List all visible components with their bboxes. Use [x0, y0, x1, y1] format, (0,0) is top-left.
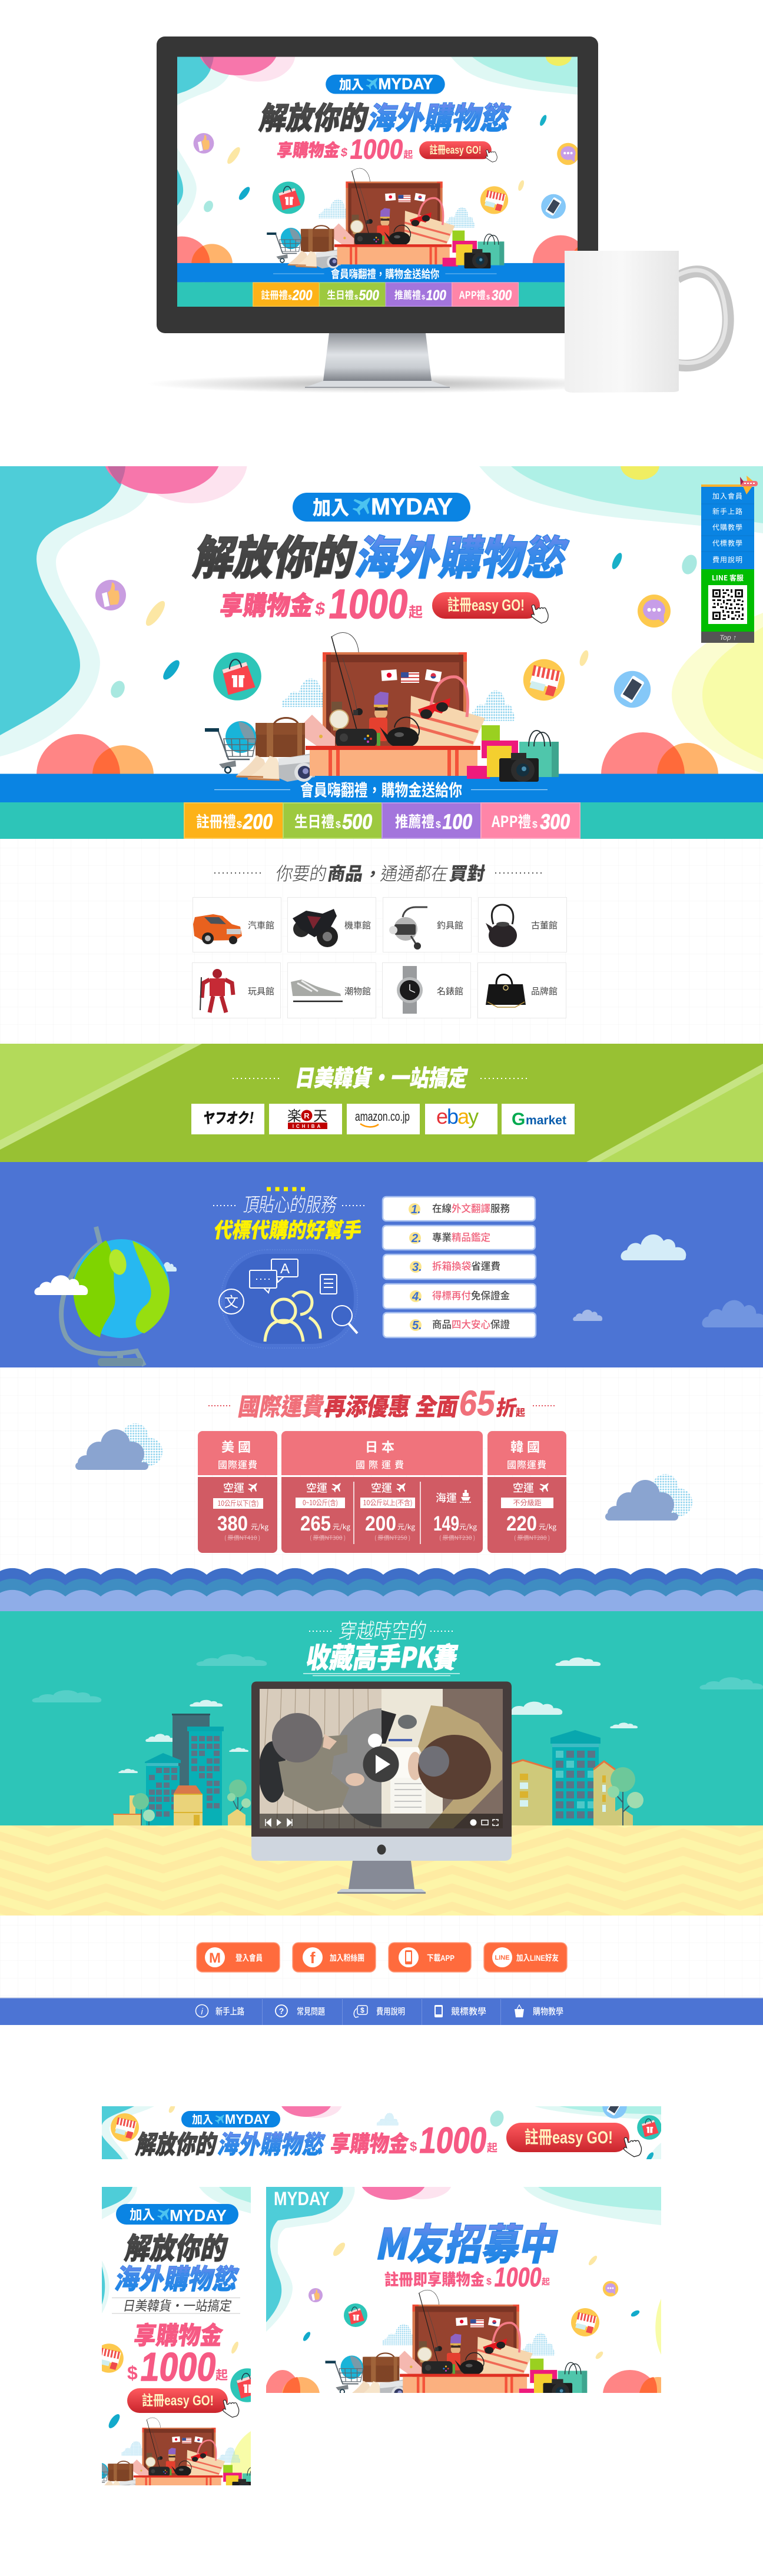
heading: products [214, 859, 544, 885]
logo: Rakuten: 楽 [287, 1104, 301, 1125]
icon: plane [740, 476, 758, 494]
footer labels: 常見問題 [297, 2007, 325, 2017]
image: watch [397, 966, 423, 1014]
table: Korea: ( 原價NT280 ) [514, 1533, 550, 1542]
banner offer: 起 [215, 2366, 228, 2384]
footer navigation [0, 1997, 763, 2025]
decorative right triangle [586, 1064, 763, 1162]
banner title: 海外購物慾 [112, 2257, 243, 2297]
gift tiles: $ [436, 820, 441, 830]
side navigation: LINE 客服 [712, 573, 744, 583]
logo: Gmarket: G [512, 1110, 525, 1129]
illustration: customer service: 文 [224, 1290, 238, 1311]
logo: Gmarket: market [526, 1114, 566, 1127]
screen hero artwork: 500 [358, 288, 380, 304]
white mug [565, 251, 728, 393]
banner offer: 1000 [493, 2262, 544, 2292]
table: USA: 空運 [223, 1480, 244, 1495]
panel: product categories [0, 839, 763, 1044]
table: Japan: 149 [433, 1512, 459, 1535]
category labels: 玩具館 [248, 987, 274, 997]
footer labels [215, 2006, 563, 2017]
side navigation: 代標教學 [712, 538, 743, 548]
category labels: 名錶館 [437, 987, 463, 997]
gift tiles: 生日禮 [294, 810, 334, 832]
logo: Yahoo auctions: ヤフオク! [202, 1107, 256, 1128]
button: app [389, 1943, 471, 1972]
category labels: 古董館 [531, 921, 558, 931]
offer text [220, 589, 423, 619]
screen hero artwork: 會員嗨翻禮，購物金送給你 [331, 265, 440, 281]
banner offer [331, 2127, 497, 2154]
offer text: 享購物金 [218, 585, 316, 622]
image: motorcycle [293, 909, 338, 947]
icon: phone [434, 2005, 443, 2017]
banner brand: MYDAY [274, 2188, 330, 2209]
side navigation: 代購教學 [712, 522, 743, 532]
gift tiles: $ [237, 820, 242, 830]
video frame [258, 1689, 503, 1828]
banner offer: 起 [487, 2140, 497, 2155]
table: Japan: ( 原價NT300 ) [310, 1533, 346, 1542]
shadow under monitor [147, 374, 618, 393]
button: app: 下載APP [427, 1953, 455, 1963]
table: USA: 380 [217, 1512, 248, 1535]
table: Korea: 元/kg [539, 1522, 556, 1532]
table: Korea: 國際運費 [507, 1457, 547, 1471]
button: login: 登入會員 [235, 1952, 263, 1964]
button: login [197, 1943, 280, 1972]
list: service items: 2. [411, 1232, 422, 1245]
mockup: desktop monitor showing the landing page [130, 25, 728, 393]
heading: one-stop: 日美韓貨・一站搞定 [293, 1060, 471, 1093]
screen hero artwork: 100 [425, 288, 447, 304]
gift tiles: 500 [341, 809, 374, 834]
heading: services: 代標代購的好幫手 [212, 1214, 364, 1244]
table: Korea: 韓國 [510, 1437, 543, 1456]
banner button [127, 2388, 240, 2419]
table: Japan: 日本 [365, 1437, 398, 1456]
list: service items: 1. [411, 1203, 421, 1216]
banner offer: $ [127, 2362, 138, 2384]
list: service items: 3. [412, 1261, 422, 1274]
monitor bezel [157, 36, 598, 333]
monitor with video [251, 1681, 512, 1894]
banner pill: MYDAY [225, 2112, 270, 2127]
banner pill: MYDAY [170, 2206, 227, 2225]
heading: contest: 收藏高手PK賽 [304, 1635, 462, 1676]
screen hero artwork: 解放你的 [256, 94, 373, 138]
button: register [432, 592, 550, 625]
decorative left triangle [0, 1044, 200, 1147]
footer labels: 購物教學 [533, 2006, 563, 2017]
banner title [114, 2233, 240, 2292]
image: fishing reel [389, 907, 427, 950]
banner title: 解放你的 [133, 2124, 221, 2161]
table: Korea: 空運 [513, 1480, 534, 1495]
table: Japan: 元/kg [333, 1522, 350, 1532]
banner pill: 加入 [130, 2207, 155, 2222]
side navigation: 新手上路 [712, 506, 743, 516]
table: Japan: 國際運費 [356, 1457, 407, 1471]
icon: basket [515, 2005, 524, 2017]
icon: info [195, 2005, 208, 2017]
side navigation: 費用說明 [712, 555, 743, 565]
heading: contest [303, 1614, 462, 1676]
screen hero artwork: 海外購物慾 [364, 94, 515, 138]
table: Japan: 200 [365, 1512, 396, 1535]
gift tiles [197, 814, 570, 829]
list: service items: 4. [412, 1290, 422, 1303]
screen hero artwork: MYDAY [378, 75, 433, 93]
table: Japan: 10公斤以上(不含) [363, 1498, 412, 1508]
hero background shapes and suitcase illustration [0, 466, 763, 839]
table: Japan: ( 原價NT230 ) [439, 1533, 475, 1542]
banner offer: 1000 [417, 2120, 490, 2161]
category labels: 機車館 [344, 921, 371, 931]
category labels: 釣具館 [437, 921, 463, 931]
button: LINE: LINE [495, 1954, 510, 1961]
gift tiles: APP禮 [491, 810, 531, 832]
gift tiles: 註冊禮 [196, 810, 236, 832]
table: Japan: 空運 [306, 1480, 327, 1495]
list: service items: 拆箱換袋省運費 [432, 1261, 500, 1272]
banner title [134, 2131, 326, 2156]
screen hero artwork: $ [422, 294, 425, 301]
heading: shipping discount: 折 [494, 1392, 520, 1422]
screen hero artwork [177, 57, 578, 307]
gift tiles: $ [336, 820, 341, 830]
screen hero artwork: APP禮 [459, 288, 486, 303]
city right [512, 1730, 643, 1825]
icon: info: i [201, 2007, 203, 2017]
side navigation: Top ↑ [719, 633, 737, 642]
logo: Amazon [347, 1104, 420, 1134]
icon: question [276, 2005, 287, 2017]
heading: services: 頂貼心的服務 [241, 1189, 340, 1217]
list: service items: 在線外文翻譯服務 [432, 1203, 510, 1214]
screen hero artwork: 300 [490, 288, 513, 304]
logo: Rakuten [269, 1104, 342, 1134]
illustration: customer service [219, 1250, 357, 1348]
city left [113, 1714, 251, 1825]
panel: action buttons [0, 1916, 763, 1998]
offer text: 1000 [326, 580, 412, 627]
title: 解放你的 [189, 521, 363, 587]
category labels [248, 921, 558, 997]
button: LINE [484, 1943, 567, 1972]
banner: horizontal leaderboard [102, 2106, 661, 2159]
clouds [158, 1234, 763, 1327]
ground: chevron pattern [0, 1825, 763, 1916]
heading: contest: 穿越時空的 [337, 1614, 429, 1645]
offer text: 起 [409, 600, 423, 621]
button: register: 註冊easy GO! [447, 596, 525, 614]
list: service items: 商品四大安心保證 [432, 1319, 510, 1330]
screen hero artwork: 生日禮 [327, 288, 354, 303]
banner: M friends recruitment [266, 2187, 661, 2393]
heading: products: 通通都在 [379, 859, 450, 885]
image: handbag [486, 975, 526, 1007]
footer labels: 競標教學 [451, 2006, 486, 2017]
play button [363, 1746, 399, 1782]
heading: shipping discount: 全面 [413, 1387, 462, 1422]
table: USA: 10公斤以下(含) [218, 1498, 259, 1508]
logo: Yahoo auctions [191, 1104, 264, 1134]
list: service items: 專業精品鑑定 [432, 1231, 490, 1243]
category labels: 潮物館 [344, 987, 371, 997]
button: fans: 加入粉絲團 [330, 1952, 364, 1964]
screen hero artwork: 1000 [348, 134, 406, 164]
cloud left [75, 1423, 162, 1470]
screen hero artwork: $ [486, 294, 490, 301]
gift tiles: 推薦禮 [395, 810, 434, 832]
button: fans: f [310, 1949, 316, 1967]
icon: fee bubble: $ [360, 2006, 364, 2014]
list: service items: 得標再付免保證金 [432, 1290, 510, 1302]
icon: fee bubble [354, 2006, 367, 2017]
heading: shipping discount: 再添優惠 [322, 1387, 413, 1422]
screen hero artwork: 200 [291, 288, 314, 304]
heading: services [212, 1189, 366, 1244]
table: USA: 國際運費 [218, 1457, 258, 1471]
banner illustration [102, 2417, 251, 2485]
panel: services [0, 1162, 763, 1367]
table: Japan: 元/kg [459, 1522, 477, 1532]
banner button: 註冊easy GO! [525, 2128, 613, 2147]
list: service items: 5. [412, 1319, 422, 1332]
screen hero artwork: 註冊禮 [261, 288, 288, 303]
banner offer: 註冊即享購物金 [384, 2267, 485, 2290]
logo: eBay [425, 1104, 497, 1134]
logo: eBay: bay [447, 1104, 477, 1128]
banner title: M友招募中 [372, 2210, 565, 2272]
icon: question: ? [279, 2006, 284, 2016]
pill: join MYDAY: 加入 [313, 497, 349, 519]
banner offer: $ [486, 2277, 492, 2287]
banner offer: 享購物金 [329, 2126, 411, 2158]
screen hero artwork: 起 [403, 147, 413, 161]
banner offer: 起 [542, 2276, 550, 2288]
table: Japan: 元/kg [397, 1522, 415, 1532]
heading: shipping discount: 65 [457, 1383, 498, 1423]
panel: hero banner [0, 466, 763, 839]
footer labels: 費用說明 [376, 2007, 405, 2017]
logo: Gmarket [502, 1104, 575, 1134]
screen hero artwork: $ [354, 294, 358, 301]
screen hero artwork: 推薦禮 [394, 288, 421, 303]
heading: products: 你要的 [274, 859, 329, 885]
decorative wave layers [0, 1568, 763, 1644]
banner title: 海外購物慾 [215, 2124, 329, 2161]
gift tiles: $ [532, 820, 538, 830]
screen hero artwork: 享購物金 [276, 137, 341, 161]
panel: international shipping [0, 1367, 763, 1611]
image: iron teapot [486, 905, 517, 947]
screen content [177, 57, 578, 307]
gift tiles: 200 [241, 809, 275, 834]
banner offer: $ [410, 2139, 417, 2154]
title: 海外購物慾 [350, 521, 575, 587]
screen hero artwork: $ [288, 294, 291, 301]
banner pill [181, 2111, 280, 2127]
image: robot toy [200, 969, 233, 1013]
banner pill [116, 2204, 238, 2225]
table: USA: 美國 [221, 1437, 254, 1456]
screen hero artwork: 加入 [339, 78, 364, 92]
table: USA: 元/kg [251, 1522, 268, 1532]
sky clouds [32, 1654, 763, 1773]
gift tiles: 100 [441, 809, 475, 834]
button: login: M [209, 1950, 221, 1966]
heading: products: 買對 [447, 859, 487, 885]
table: USA [198, 1431, 277, 1553]
cloud right [605, 1474, 692, 1521]
monitor stand [305, 333, 450, 388]
banner offer [384, 2262, 550, 2292]
table: USA: ( 原價NT410 ) [224, 1533, 260, 1542]
logo: Amazon: amazon.co.jp [355, 1109, 410, 1124]
offer text: $ [314, 599, 327, 619]
heading: shipping discount: 起 [516, 1405, 525, 1419]
table: Korea: 220 [506, 1512, 537, 1535]
banner offer: 享購物金 [132, 2316, 225, 2352]
button: LINE: 加入LINE好友 [516, 1953, 559, 1963]
gift tiles: 300 [539, 809, 572, 834]
banner button [506, 2123, 643, 2159]
banner offer: 1000 [138, 2345, 220, 2389]
panel: video contest [0, 1611, 763, 1924]
category cards [192, 897, 566, 1018]
image: car [193, 914, 242, 944]
footer labels: 新手上路 [215, 2006, 244, 2017]
button: fans [293, 1943, 376, 1972]
logo: eBay: e [436, 1104, 447, 1128]
logo: Rakuten: ICHIBA [293, 1124, 323, 1129]
banner button: 註冊easy GO! [142, 2393, 214, 2409]
image: sneaker [291, 980, 343, 1002]
screen hero artwork: $ [340, 147, 349, 159]
table: Japan [281, 1431, 483, 1553]
panel: marketplaces [0, 1044, 763, 1162]
heading: products: ， [362, 861, 384, 885]
side navigation: 加入會員 [712, 491, 743, 501]
heading: products: 商品 [326, 859, 366, 885]
table: Japan: 海運 [436, 1490, 457, 1505]
icon: globe [34, 1227, 170, 1366]
banner illustration [326, 2290, 587, 2401]
logo: Rakuten: 天 [313, 1104, 327, 1125]
logo: Rakuten: R [304, 1111, 310, 1120]
pill: join MYDAY: MYDAY [371, 494, 453, 520]
banner: vertical skyscraper [102, 2187, 251, 2485]
banner pill: 加入 [192, 2113, 213, 2126]
table: Japan: ( 原價NT250 ) [374, 1533, 410, 1542]
screen hero artwork: 註冊easy GO! [430, 144, 481, 156]
title [192, 533, 570, 579]
banner title: 解放你的 [122, 2225, 232, 2268]
table: Korea [487, 1431, 566, 1553]
category labels: 品牌館 [531, 987, 558, 997]
list: service items [383, 1197, 536, 1337]
heading: shipping discount [208, 1383, 556, 1423]
banner offer [127, 2322, 227, 2382]
side navigation [701, 476, 758, 643]
table: Japan: 0~10公斤(含) [303, 1498, 338, 1508]
table: Japan: 265 [300, 1512, 331, 1535]
illustration: customer service: A [280, 1261, 290, 1277]
table: Korea: 不分級距 [513, 1498, 542, 1508]
banner tagline: 日美韓貨・一站搞定 [122, 2295, 234, 2315]
table: Japan: 空運 [371, 1480, 392, 1495]
heading: shipping discount: 國際運費 [236, 1387, 327, 1422]
category labels: 汽車館 [248, 921, 274, 931]
band heading: 會員嗨翻禮，購物金送給你 [300, 778, 462, 801]
pill: join MYDAY [293, 493, 470, 522]
